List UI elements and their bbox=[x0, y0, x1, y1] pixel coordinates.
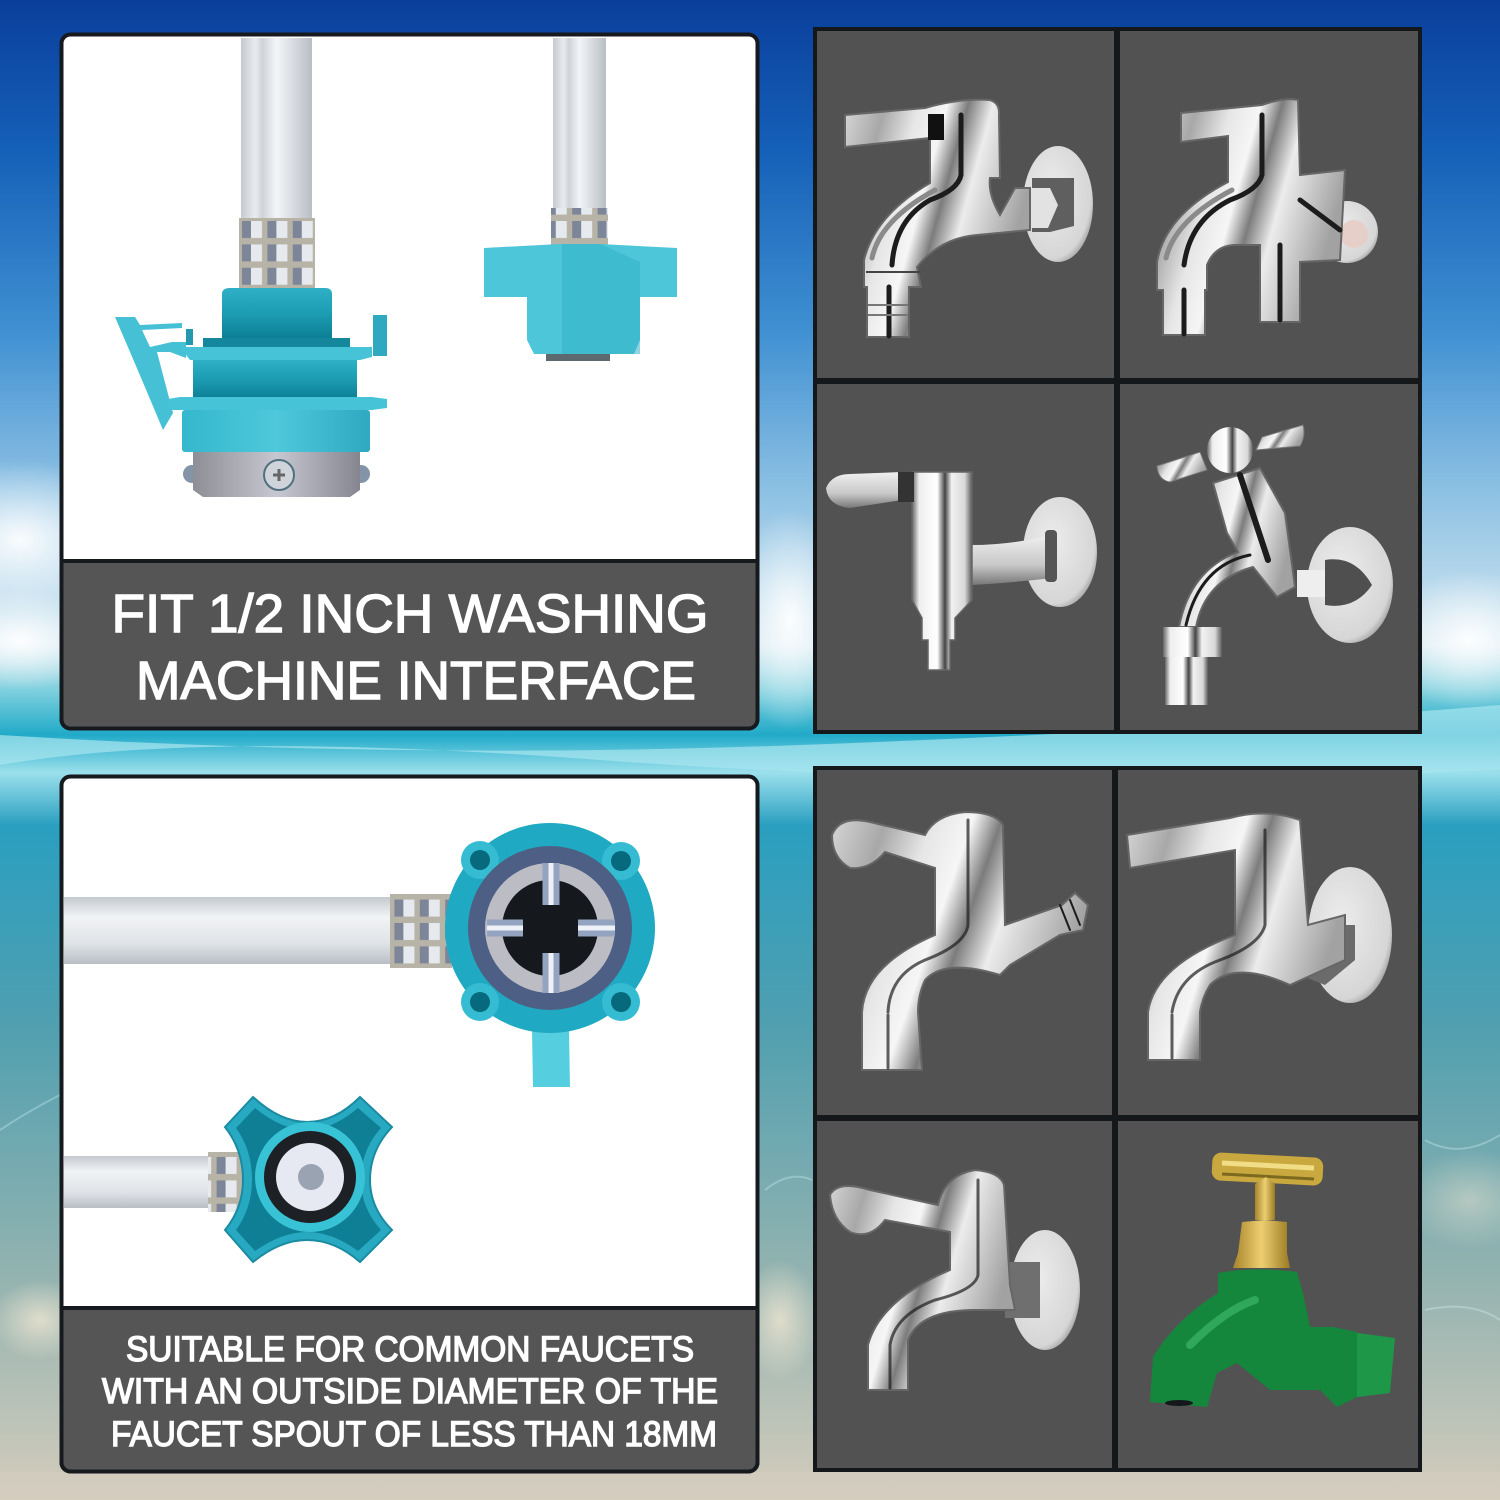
caption band bbox=[62, 561, 758, 728]
caption text: FIT 1/2 INCH WASHING bbox=[112, 584, 708, 644]
faucet: lever with flange bbox=[1127, 813, 1392, 1060]
faucet: lever with round flange bbox=[845, 100, 1093, 337]
faucet: wall-mounted lever bbox=[830, 1170, 1080, 1390]
caption band bbox=[62, 1308, 758, 1472]
faucet: straight body bbox=[826, 472, 1097, 670]
caption text: WITH AN OUTSIDE DIAMETER OF THE bbox=[102, 1372, 718, 1411]
illustration: threaded connector, side view bbox=[484, 38, 677, 361]
faucet: cross handle bbox=[1157, 425, 1393, 705]
panel: common faucets bbox=[62, 776, 758, 1472]
caption text: MACHINE INTERFACE bbox=[136, 651, 696, 711]
faucet: green cast iron with brass handle bbox=[1150, 1152, 1395, 1407]
panel: faucet grid, top bbox=[815, 29, 1420, 732]
panel: washing machine interface bbox=[62, 34, 758, 728]
caption text: SUITABLE FOR COMMON FAUCETS bbox=[126, 1330, 694, 1369]
illustration: adapter, front view with hose bbox=[64, 823, 655, 1087]
faucet: curved lever threaded bbox=[832, 812, 1088, 1070]
faucet: dual outlet bbox=[1157, 99, 1378, 335]
caption text: FAUCET SPOUT OF LESS THAN 18MM bbox=[111, 1415, 717, 1454]
illustration: assembled adapter, side view bbox=[115, 38, 387, 497]
illustration: connector, front view with hose bbox=[64, 1097, 392, 1262]
panel: faucet grid, bottom bbox=[815, 768, 1420, 1470]
